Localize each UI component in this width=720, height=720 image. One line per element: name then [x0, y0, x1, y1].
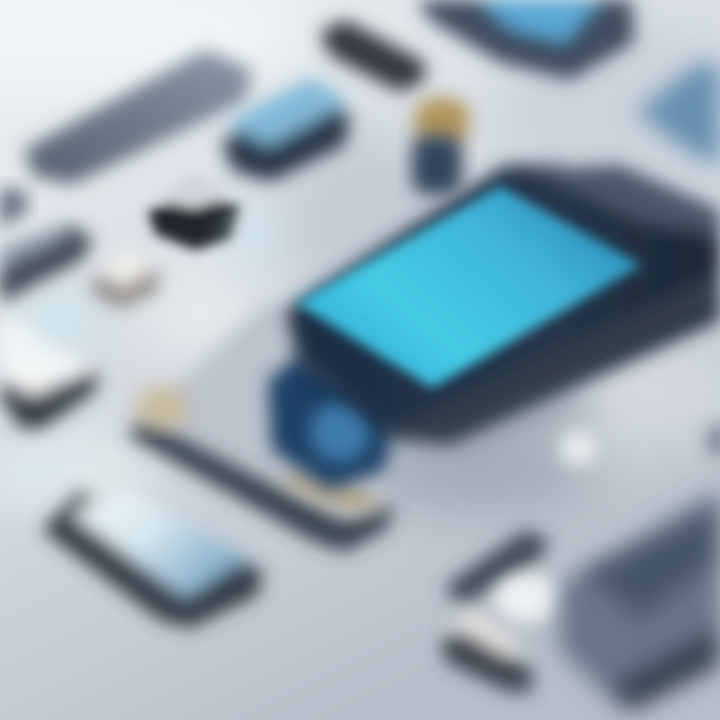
device: dark panel top right	[418, 0, 634, 80]
gold button	[415, 98, 469, 146]
device: small cream chip	[90, 250, 160, 308]
button stem	[412, 135, 462, 195]
background soft shading	[0, 0, 720, 515]
gold edge lower	[278, 462, 382, 518]
device: white chip lower right	[494, 574, 562, 622]
device: blue tile far right	[636, 62, 720, 165]
blue module	[268, 355, 400, 490]
shadow below phone	[400, 380, 600, 480]
tablet dark edge	[126, 420, 395, 552]
device: blue tile top centre	[222, 78, 350, 182]
main phone: cyan screen	[296, 186, 642, 388]
device: white-blue card bottom left	[42, 486, 262, 628]
device: grey bar left	[0, 224, 92, 300]
small highlight right of phone	[560, 424, 720, 466]
device: white card left	[0, 318, 98, 430]
device: dark stacked panel bottom right	[560, 490, 720, 712]
device: small dark stub left edge	[0, 188, 30, 228]
device: pill with highlight bottom	[440, 610, 532, 692]
device: dark pill top centre	[320, 20, 425, 92]
gold accent on tablet	[136, 388, 188, 428]
light blue glow left	[0, 207, 273, 500]
main phone: dark body	[285, 165, 720, 445]
device: dark pill lower right	[446, 530, 550, 602]
device: small dark tile centre left	[148, 172, 240, 250]
device: long grey bar top left	[24, 50, 252, 184]
large grey tablet under phone	[135, 300, 400, 520]
